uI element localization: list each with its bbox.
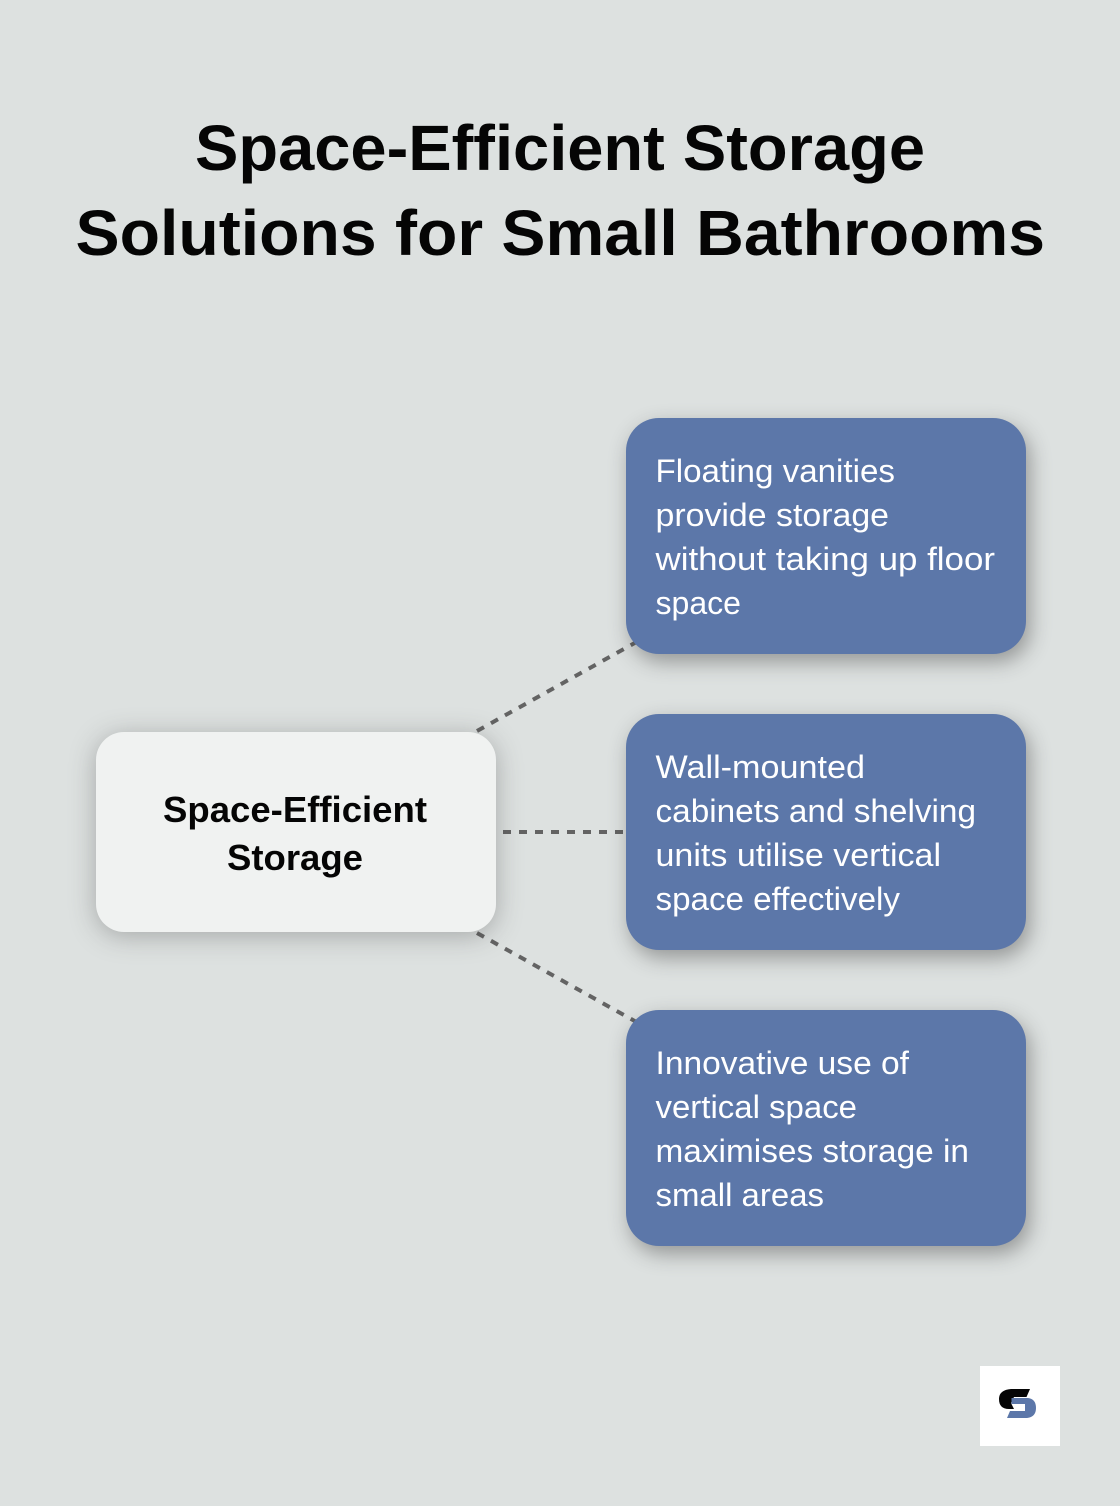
panel: wall-mounted cabinets: space effectively (656, 881, 900, 917)
panel: wall-mounted cabinets: cabinets and shelving (656, 793, 976, 829)
panel: floating vanities: without taking up floor (654, 541, 995, 577)
panel: central topic: Storage (227, 837, 363, 878)
panel: floating vanities: space (656, 585, 741, 621)
panel: wall-mounted cabinets (626, 714, 1026, 950)
panel: vertical space: Innovative use of (656, 1045, 909, 1081)
title: Solutions for Small Bathrooms (76, 197, 1045, 269)
panel: vertical space (626, 1010, 1026, 1246)
panel: floating vanities (626, 418, 1026, 654)
panel: vertical space: maximises storage in (656, 1133, 969, 1169)
panel: floating vanities: provide storage (656, 497, 889, 533)
panel: central topic (96, 732, 496, 932)
panel: vertical space: small areas (656, 1177, 824, 1213)
panel: wall-mounted cabinets: Wall-mounted (656, 749, 865, 785)
panel: central topic: Space-Efficient (163, 789, 427, 830)
panel: wall-mounted cabinets: units utilise vertical (656, 837, 941, 873)
panel: vertical space: vertical space (656, 1089, 857, 1125)
icon: logo (980, 1366, 1060, 1446)
title (76, 112, 1045, 269)
panel: floating vanities: Floating vanities (656, 453, 895, 489)
title: Space-Efficient Storage (195, 112, 925, 184)
